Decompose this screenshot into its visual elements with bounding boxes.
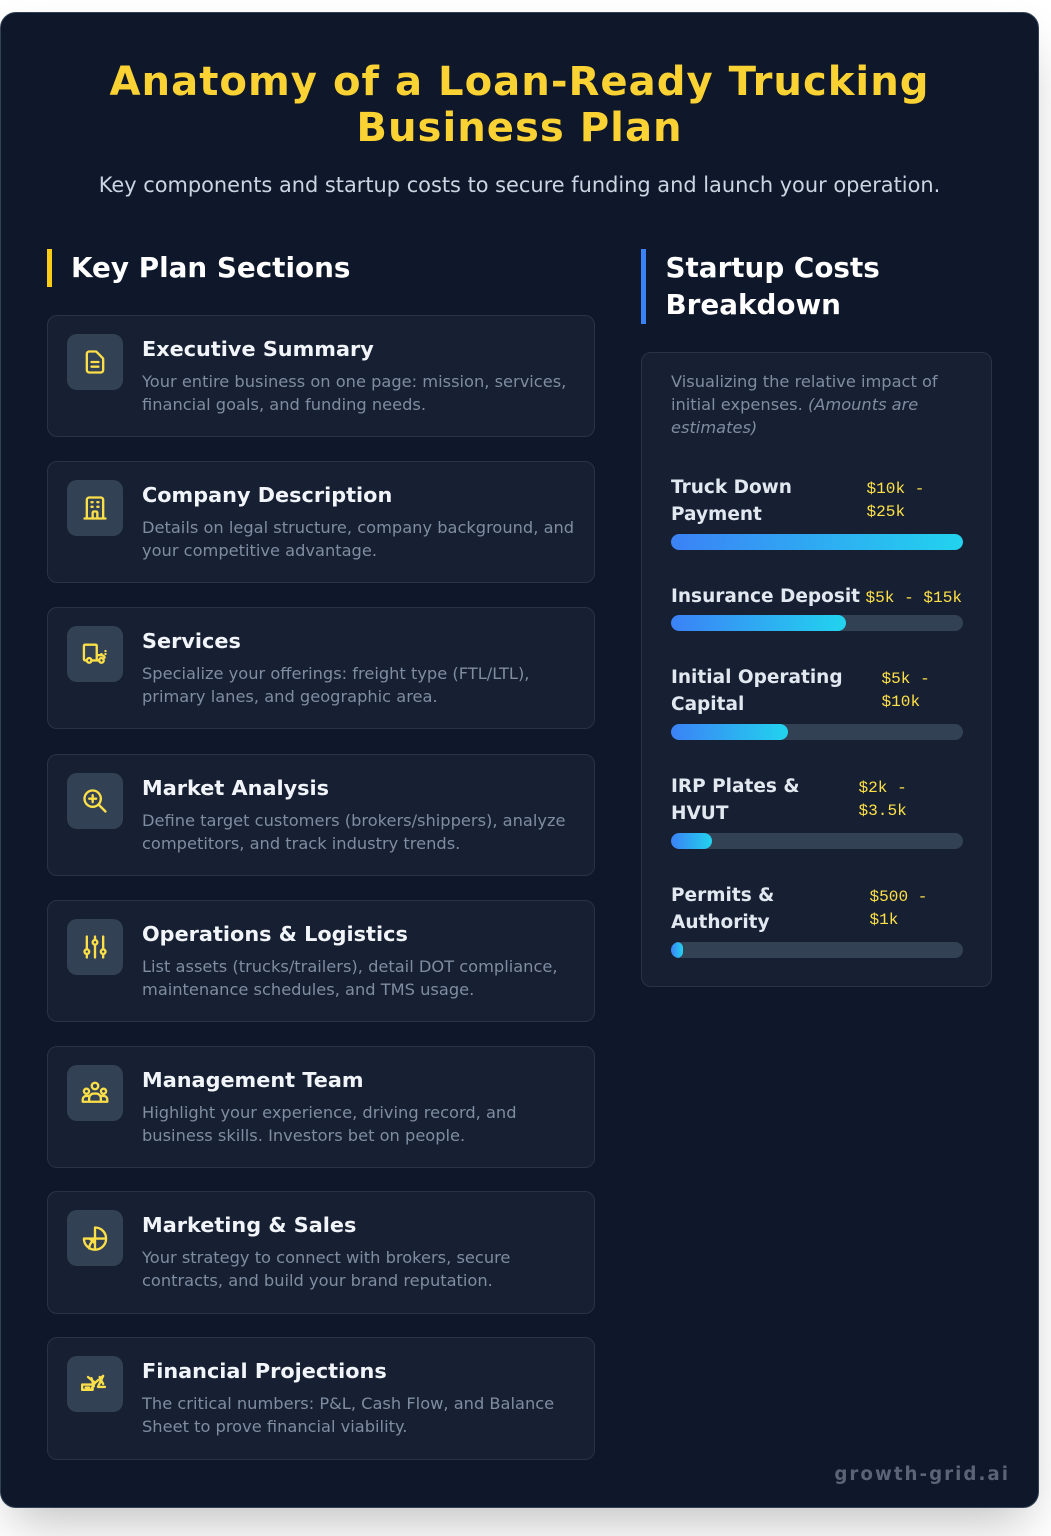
- heading: key plan sections: Key Plan Sections: [71, 251, 350, 284]
- heading: startup costs: [641, 249, 880, 324]
- card title: Company Description: [142, 483, 392, 507]
- card: services: [47, 607, 595, 729]
- label: [671, 776, 800, 824]
- card text: [142, 956, 558, 998]
- label: Truck Down: [671, 476, 792, 498]
- card title: Services: [142, 629, 241, 653]
- title: Anatomy of a Loan-Ready Trucking: [109, 59, 930, 105]
- card text: competitors, and track industry trends.: [142, 834, 460, 852]
- value: $5k -: [882, 670, 930, 688]
- label: Initial Operating: [671, 666, 843, 688]
- card: executive summary: [47, 315, 595, 437]
- card text: [142, 664, 529, 706]
- value: $1k: [870, 911, 898, 929]
- card text: [142, 1394, 554, 1436]
- label: IRP Plates &: [671, 776, 800, 796]
- panel intro text: initial expenses. (Amounts are: [671, 395, 918, 414]
- card text: [142, 372, 566, 414]
- card: operations and logistics: [47, 900, 595, 1022]
- track: [671, 615, 963, 631]
- card text: [142, 1102, 517, 1144]
- footer brand: growth-grid.ai: [834, 1464, 1010, 1485]
- label: Insurance Deposit: [671, 586, 860, 606]
- label: HVUT: [671, 803, 728, 824]
- icon: pie chart: [67, 1210, 123, 1266]
- bar: insurance deposit: [671, 586, 963, 631]
- track: [671, 724, 963, 740]
- card title: Financial Projections: [142, 1359, 387, 1383]
- panel intro text: estimates): [671, 418, 757, 437]
- icon: magnifier: [67, 772, 123, 828]
- bar: permits and authority: [671, 884, 963, 958]
- card: management team: [47, 1046, 595, 1168]
- label: Payment: [671, 504, 762, 525]
- value: $25k: [866, 503, 905, 521]
- label: Permits &: [671, 884, 774, 906]
- title: [109, 59, 930, 151]
- heading: startup costs: Startup Costs: [666, 251, 880, 284]
- icon: money: [67, 1356, 123, 1412]
- panel intro text: [671, 372, 938, 437]
- label: [671, 476, 792, 525]
- icon: team: [67, 1064, 123, 1120]
- card text: Highlight your experience, driving record, and: [142, 1102, 517, 1122]
- card text: maintenance schedules, and TMS usage.: [142, 980, 474, 998]
- icon: sliders: [67, 918, 123, 974]
- value: $10k: [882, 693, 920, 711]
- label: [671, 884, 774, 933]
- card title: Marketing & Sales: [142, 1213, 356, 1237]
- card title: Market Analysis: [142, 776, 329, 800]
- icon: building: [67, 480, 123, 536]
- title: Business Plan: [356, 105, 683, 151]
- card text: [142, 810, 566, 852]
- card text: primary lanes, and geographic area.: [142, 687, 438, 706]
- panel intro text: Visualizing the relative impact of: [671, 372, 938, 391]
- card text: Specialize your offerings: freight type (FTL/LTL),: [142, 664, 529, 683]
- card text: Define target customers (brokers/shippers), analyze: [142, 810, 566, 830]
- value: [858, 779, 907, 820]
- value: [882, 670, 930, 711]
- bar: truck down payment: [671, 476, 963, 550]
- icon: truck: [67, 626, 123, 682]
- track: [671, 942, 963, 958]
- card text: contracts, and build your brand reputation.: [142, 1271, 493, 1290]
- card text: Sheet to prove financial viability.: [142, 1417, 407, 1436]
- card text: [142, 1248, 510, 1290]
- card text: Your strategy to connect with brokers, secure: [142, 1248, 510, 1267]
- card title: Management Team: [142, 1068, 364, 1092]
- card: marketing and sales: [47, 1191, 595, 1314]
- label: Authority: [671, 912, 770, 933]
- card text: financial goals, and funding needs.: [142, 395, 426, 414]
- value: $3.5k: [858, 802, 907, 820]
- card title: Operations & Logistics: [142, 922, 408, 946]
- subtitle: Key components and startup costs to secure funding and launch your operation.: [99, 173, 940, 197]
- card text: List assets (trucks/trailers), detail DOT compliance,: [142, 956, 558, 976]
- value: $5k - $15k: [866, 589, 962, 607]
- card text: your competitive advantage.: [142, 541, 377, 560]
- heading: startup costs: Breakdown: [666, 288, 841, 321]
- value: $2k -: [858, 779, 907, 797]
- bar: irp plates and hvut: [671, 776, 963, 849]
- card: company description: [47, 461, 595, 583]
- card text: Details on legal structure, company background, and: [142, 518, 574, 537]
- value: $500 -: [870, 888, 927, 906]
- card text: The critical numbers: P&L, Cash Flow, and Balance: [142, 1394, 554, 1413]
- bar: initial operating capital: [671, 666, 963, 740]
- card: market analysis: [47, 754, 595, 876]
- panel: cost breakdown: [641, 352, 992, 987]
- card text: Your entire business on one page: mission, services,: [142, 372, 566, 391]
- label: Capital: [671, 694, 744, 715]
- value: $10k -: [866, 480, 924, 498]
- value: [870, 888, 927, 929]
- icon: document: [67, 334, 123, 390]
- label: [671, 666, 843, 715]
- track: [671, 534, 963, 550]
- card title: Executive Summary: [142, 337, 374, 361]
- card text: business skills. Investors bet on people.: [142, 1126, 465, 1144]
- card text: [142, 518, 574, 560]
- track: [671, 833, 963, 849]
- card: financial projections: [47, 1337, 595, 1460]
- value: [866, 480, 924, 521]
